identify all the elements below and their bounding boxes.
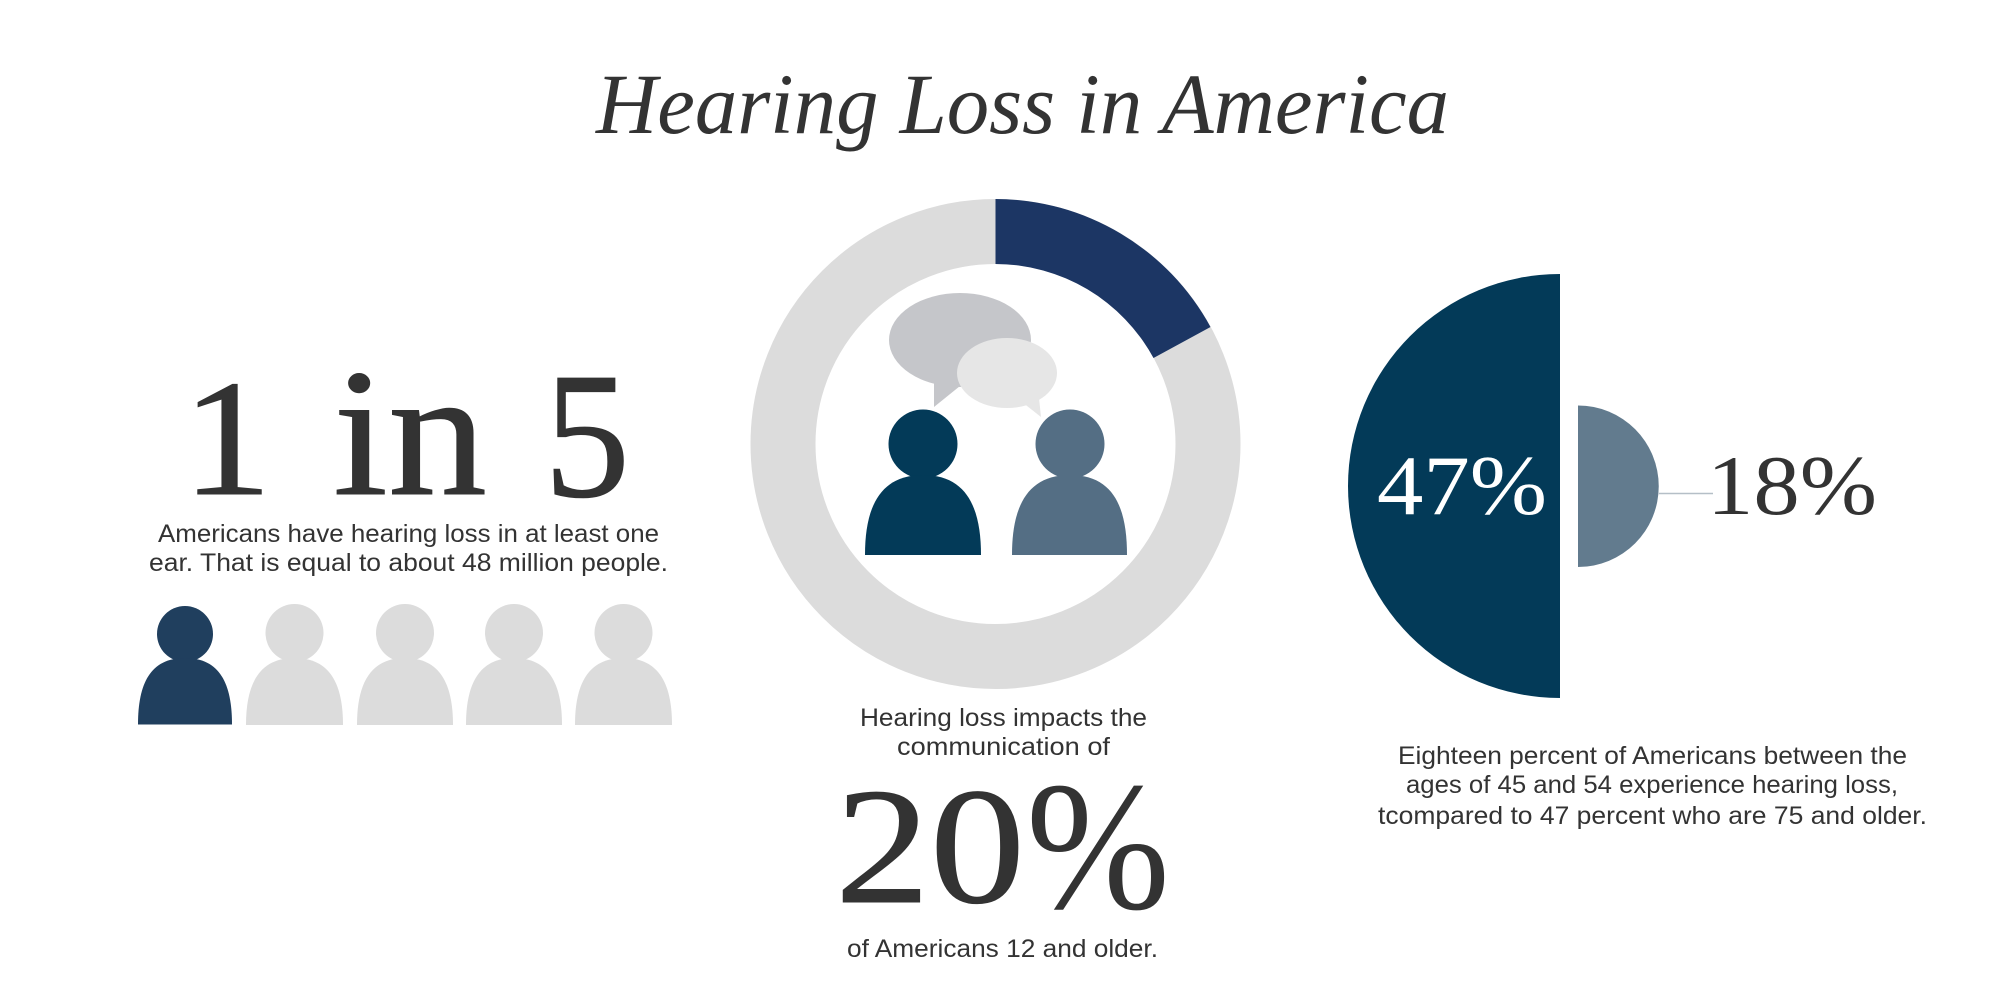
- icon: grey person 2: [246, 604, 343, 725]
- text: Americans have hearing loss: Americans have hearing loss in at least one: [158, 520, 659, 548]
- panel: 1 in 5: [138, 333, 672, 725]
- panel: age comparison: [1348, 274, 1927, 830]
- text: of Americans 12 and older: of Americans 12 and older.: [847, 935, 1158, 963]
- icon: grey person 4: [466, 604, 562, 725]
- text: Americans have hearing loss: [149, 520, 668, 577]
- big number: 20%: [835, 744, 1170, 948]
- text: Hearing loss impacts: [860, 704, 1147, 761]
- title: Hearing Loss in America: [595, 56, 1449, 152]
- icon row: five people, one highlighted: [138, 604, 672, 725]
- text: Hearing loss impacts: communication of: [897, 733, 1110, 761]
- text: Eighteen percent of Americans: Eighteen percent of Americans between the: [1398, 742, 1907, 770]
- panel: communication donut: [783, 199, 1210, 963]
- donut highlighted segment: [996, 199, 1210, 358]
- chart: 47 percent half circle: [1348, 274, 1560, 698]
- leader line: [1659, 492, 1713, 494]
- stat: 47%: 47%: [1377, 439, 1547, 533]
- big number: 1 in 5: [182, 333, 630, 535]
- big number: 20%: 20: [835, 754, 1025, 938]
- text: Hearing loss impacts: Hearing loss impacts the: [860, 704, 1147, 732]
- big number: 1 in 5: in: [333, 333, 487, 534]
- big number: 1 in 5: 5: [544, 336, 630, 535]
- icon: small speech bubble: [957, 338, 1057, 417]
- icon: highlighted person: [138, 606, 232, 724]
- chart: 18 percent half circle: [1578, 406, 1659, 567]
- big number: 20%: %: [1026, 744, 1170, 948]
- icon: grey person 3: [357, 604, 453, 725]
- donut track: [783, 232, 1208, 656]
- stat: 18%: 18%: [1707, 439, 1877, 533]
- text: Americans have hearing loss: ear. That is equal to about 48 million people.: [149, 549, 668, 577]
- icon: large speech bubble: [889, 293, 1031, 407]
- big number: 1 in 5: 1: [182, 346, 272, 530]
- icon: right person: [1012, 410, 1127, 555]
- text: Eighteen percent of Americans: [1378, 742, 1927, 830]
- icon: left person: [865, 410, 981, 555]
- text: Eighteen percent of Americans: ages of 45 and 54 experience hearing loss,: [1406, 771, 1898, 799]
- icon: grey person 5: [575, 604, 672, 725]
- text: Eighteen percent of Americans: tcompared to 47 percent who are 75 and older.: [1378, 802, 1927, 830]
